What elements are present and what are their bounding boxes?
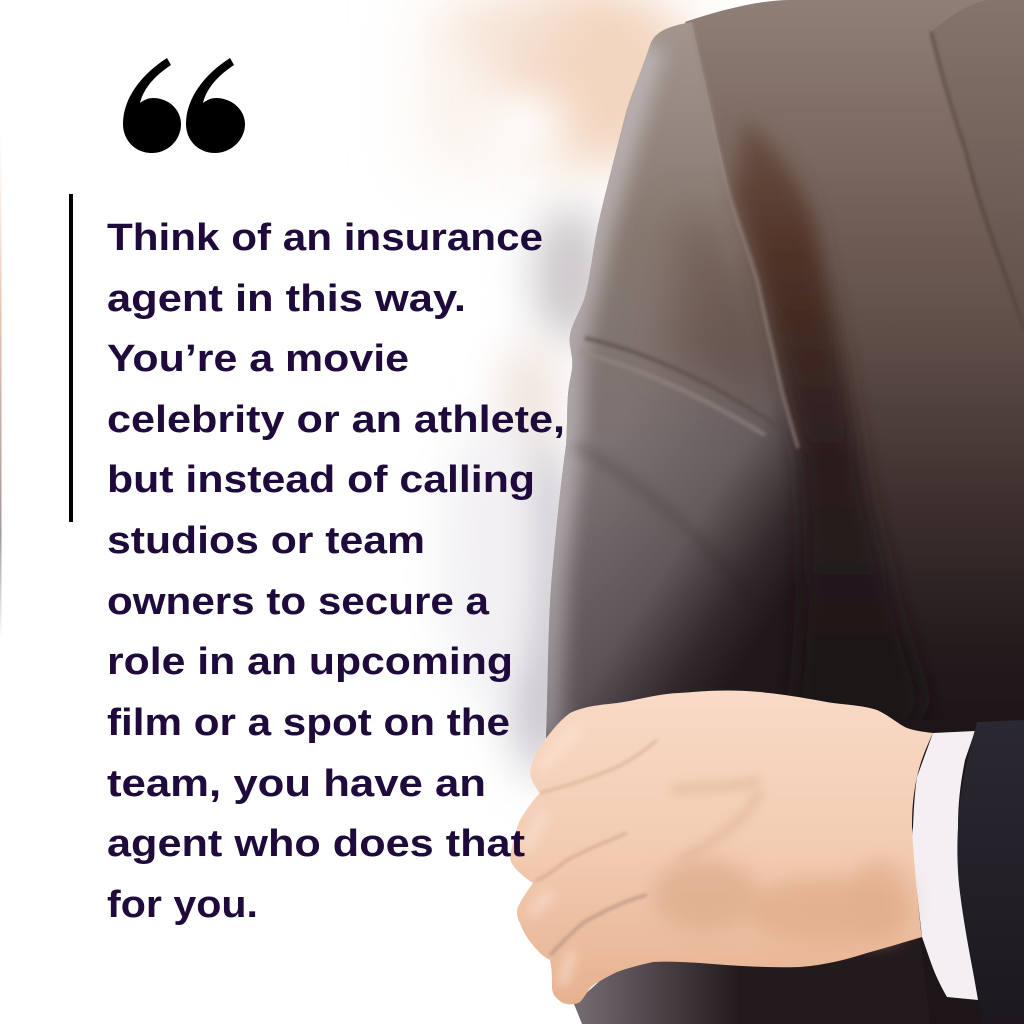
finger gap 2 <box>535 833 627 881</box>
quote text: team, you have an <box>107 763 486 805</box>
lapel <box>931 0 1024 330</box>
photo: man in suit <box>510 0 1024 1024</box>
quote text: You’re a movie <box>107 338 409 380</box>
tendon shade 2 <box>680 790 760 860</box>
jacket right of hand <box>690 720 985 1024</box>
sleeve lower right shadow <box>546 307 816 738</box>
hand shadow patch <box>653 859 757 931</box>
wrist shadow patch <box>745 878 905 942</box>
quote text: agent in this way. <box>107 278 466 320</box>
quote text: film or a spot on the <box>107 702 510 744</box>
sleeve upper shadow near crease <box>654 214 773 396</box>
shoulder seam <box>692 22 798 448</box>
quote text: Think of an insurance <box>107 217 543 259</box>
sleeve <box>546 22 804 738</box>
jacket under hand <box>574 930 990 1024</box>
cuff <box>912 731 978 1000</box>
quote text: studios or team <box>107 520 425 562</box>
tendon shade <box>672 780 760 790</box>
finger gap 3 <box>550 895 647 955</box>
vertical rule <box>69 194 73 522</box>
quote text: role in an upcoming <box>107 641 513 683</box>
quote text: owners to secure a <box>107 581 490 623</box>
quote text: celebrity or an athlete, <box>107 399 565 441</box>
lapel edge <box>931 32 1024 330</box>
quote text <box>107 217 565 926</box>
sleeve lower fold <box>573 442 679 520</box>
jacket torso <box>685 0 1024 740</box>
icon: quotation mark <box>123 58 245 153</box>
sleeve left highlight <box>546 45 650 740</box>
dark sleeve <box>957 720 1024 1024</box>
fingertip highlights <box>524 728 578 985</box>
sleeve crease light <box>596 356 766 437</box>
finger gap 1 <box>540 740 657 793</box>
quote text: but instead of calling <box>107 459 535 501</box>
quote text: for you. <box>107 884 258 926</box>
sleeve crease shadow <box>585 338 775 425</box>
quote text: agent who does that <box>107 823 525 865</box>
lower hand shade <box>850 860 910 940</box>
hand <box>510 690 933 1004</box>
dark fold wedge <box>735 118 925 745</box>
